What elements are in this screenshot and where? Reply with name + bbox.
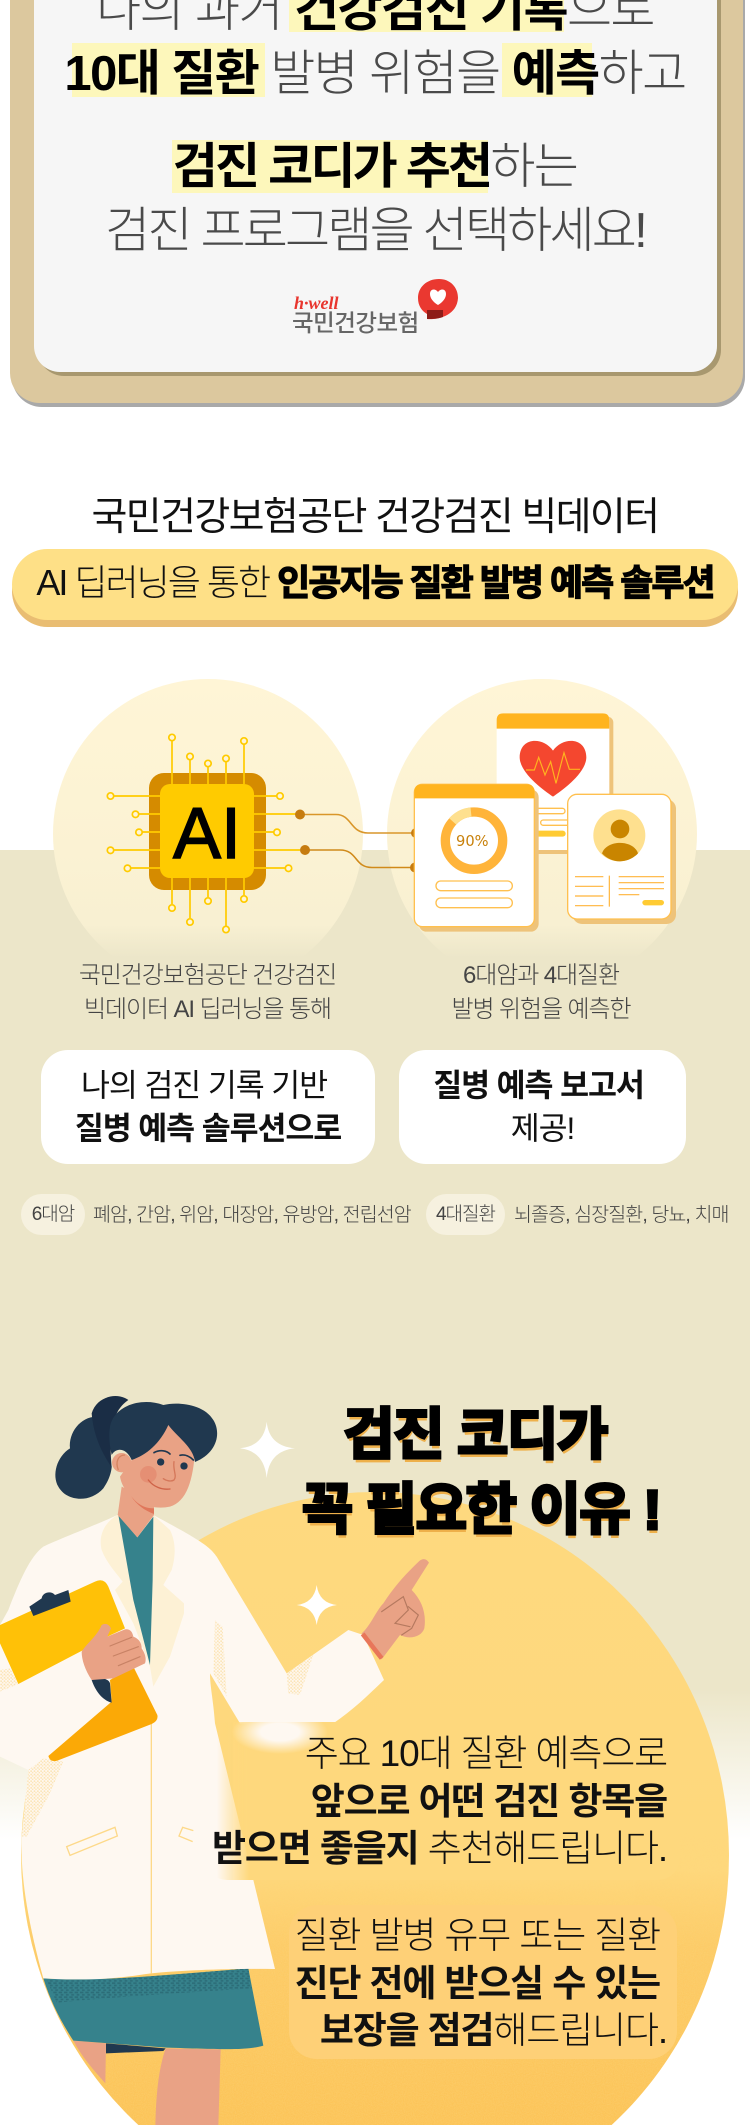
intro text xyxy=(64,0,686,258)
text: reason one: 앞으로 어떤 검진 항목을 xyxy=(311,1780,667,1822)
illustration: doctor and orange circle xyxy=(0,1396,729,2125)
clipboard xyxy=(0,1580,158,1761)
banner: AI solution xyxy=(12,549,738,620)
icon: sparkle large xyxy=(240,1422,295,1478)
hair xyxy=(55,1396,217,1499)
icon: AI chip xyxy=(107,734,300,933)
caption: right column xyxy=(452,962,631,1023)
circle: right backdrop xyxy=(387,679,697,936)
skirt xyxy=(43,1968,263,2049)
text: reason two: 보장을 점검해드립니다. xyxy=(320,2010,667,2051)
tag: six cancers xyxy=(21,1194,85,1235)
hand on clipboard xyxy=(82,1624,146,1703)
text: reason one xyxy=(212,1733,667,1869)
heading: why coordination is needed: 검진 코디가 xyxy=(343,1403,607,1466)
intro text: 검진 프로그램을 선택하세요! xyxy=(105,204,645,258)
callout: prediction solution: 나의 검진 기록 기반 xyxy=(81,1067,327,1103)
heading: why coordination is needed xyxy=(302,1403,660,1541)
legs xyxy=(73,2041,221,2125)
callout: prediction solution: 질병 예측 솔루션으로 xyxy=(75,1110,341,1146)
lab coat xyxy=(0,1515,384,1979)
intro text: 검진 코디가 추천하는 xyxy=(173,140,577,194)
text: reason two xyxy=(295,1915,667,2051)
icon: sparkle small xyxy=(297,1585,337,1625)
section background: beige band xyxy=(0,850,750,1850)
panel: intro card xyxy=(10,0,745,407)
caption: left column: 국민건강보험공단 건강검진 xyxy=(79,962,336,989)
text: reason one: 주요 10대 질환 예측으로 xyxy=(305,1733,667,1774)
caption: right column: 6대암과 4대질환 xyxy=(463,962,619,989)
logo: h-well national health insurance: 국민건강보험 xyxy=(292,310,419,336)
icon: AI chip: AI xyxy=(173,794,241,874)
heading: big data: 국민건강보험공단 건강검진 빅데이터 xyxy=(92,496,658,539)
illustration: doctor xyxy=(0,1396,429,2125)
logo: h-well national health insurance: h·well xyxy=(294,293,339,313)
circle: left backdrop xyxy=(53,679,363,936)
list: four diseases: 뇌졸증, 심장질환, 당뇨, 치매 xyxy=(514,1204,729,1226)
logo: h-well national health insurance xyxy=(292,279,458,336)
neck and face xyxy=(112,1425,195,1537)
circle: orange backdrop xyxy=(0,1492,750,2125)
diagram: AI chip to reports xyxy=(53,679,697,936)
tag: four diseases: 4대질환 xyxy=(436,1204,495,1225)
connectors: chip to report xyxy=(295,810,421,872)
icon: 90 percent report xyxy=(414,784,539,932)
callout: prediction report: 제공! xyxy=(511,1110,574,1146)
icon: report cards xyxy=(414,713,676,932)
tag: six cancers: 6대암 xyxy=(32,1204,74,1225)
icon: heart report xyxy=(497,713,613,854)
caption: left column xyxy=(79,962,336,1023)
text: reason two: 질환 발병 유무 또는 질환 xyxy=(295,1915,660,1956)
tag: four diseases xyxy=(426,1194,505,1235)
text: reason two: 진단 전에 받으실 수 있는 xyxy=(295,1962,660,2004)
callout: prediction report xyxy=(399,1050,686,1164)
caption: right column: 발병 위험을 예측한 xyxy=(452,996,630,1023)
panel: reason two xyxy=(289,1905,677,2059)
icon: profile report xyxy=(568,794,676,924)
intro text: 10대 질환 발병 위험을 예측하고 xyxy=(64,47,686,101)
list: six cancers: 폐암, 간암, 위암, 대장암, 유방암, 전립선암 xyxy=(93,1204,411,1226)
text: reason one: 받으면 좋을지 추천해드립니다. xyxy=(212,1828,667,1869)
banner: AI solution: AI 딥러닝을 통한 인공지능 질환 발병 예측 솔루션 xyxy=(36,562,714,603)
icon: 90 percent report: 90% xyxy=(456,833,489,850)
callout: prediction solution xyxy=(41,1050,375,1164)
panel: reason one xyxy=(205,1722,680,1880)
caption: left column: 빅데이터 AI 딥러닝을 통해 xyxy=(84,996,331,1023)
heading: why coordination is needed: 꼭 필요한 이유 ! xyxy=(302,1478,660,1541)
callout: prediction report: 질병 예측 보고서 xyxy=(433,1067,644,1103)
pointing hand xyxy=(362,1559,429,1659)
